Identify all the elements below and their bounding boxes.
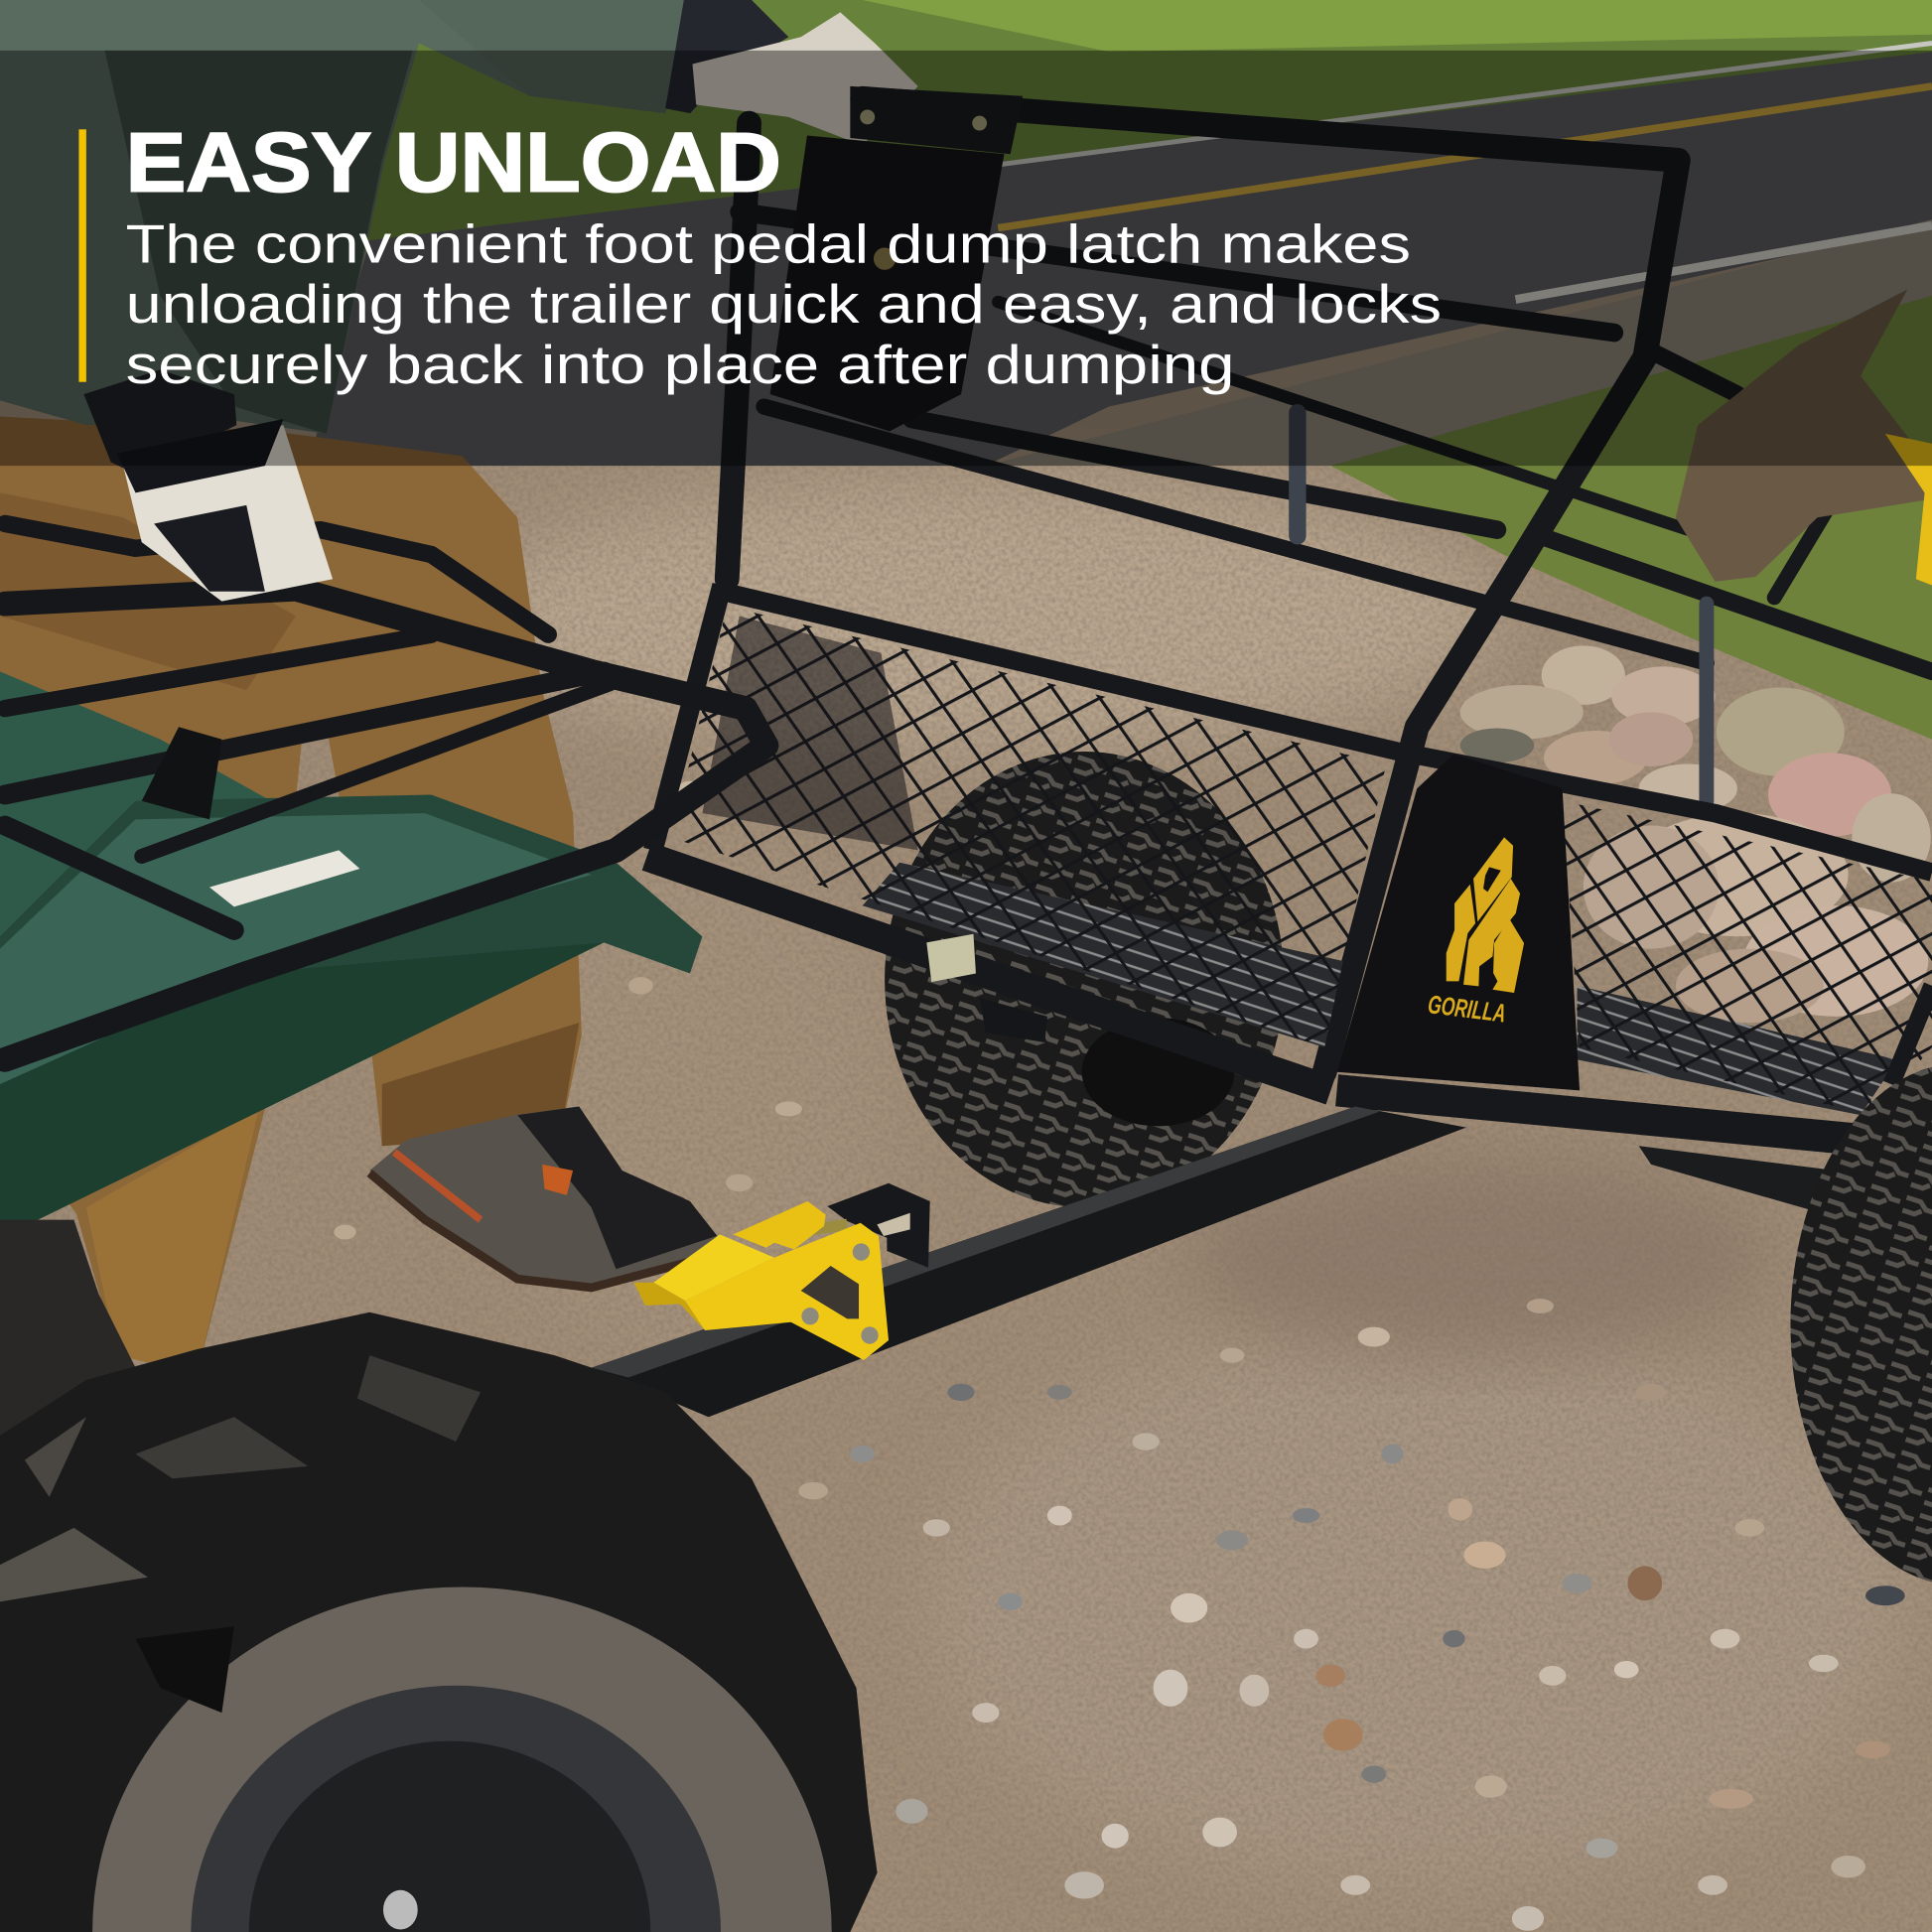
gusset plate with logo bbox=[1337, 755, 1580, 1090]
trailer tongue beam bbox=[592, 1106, 1836, 1417]
ATV: suspension spring bbox=[0, 1220, 136, 1466]
semi-transparent header band bbox=[0, 51, 1932, 466]
small hinge bracket bbox=[926, 934, 1047, 1042]
ATV: large front tire bbox=[0, 1312, 878, 1932]
wire mesh side, right section bbox=[1563, 801, 1932, 1115]
gravel pebbles bbox=[334, 781, 1905, 1931]
rear trailer tire bbox=[885, 752, 1284, 1207]
body text: The convenient foot pedal dump latch makes bbox=[126, 213, 1411, 274]
trailer: rear frame and gate bars bbox=[727, 98, 1932, 1072]
yellow foot pedal latch bbox=[633, 1183, 930, 1360]
yellow accent bar bbox=[78, 129, 86, 382]
front right trailer tire bbox=[1790, 1067, 1932, 1583]
dump gate latch plate bbox=[770, 86, 1023, 431]
background: grass, road and shoulder bbox=[308, 0, 1932, 740]
person: shirt bbox=[0, 0, 692, 434]
trailer floor bbox=[863, 863, 1897, 1115]
body text: unloading the trailer quick and easy, and locks bbox=[126, 274, 1442, 335]
trailer side rails bbox=[647, 586, 1932, 1140]
body text: securely back into place after dumping bbox=[126, 335, 1235, 395]
heading: EASY UNLOAD bbox=[126, 115, 781, 208]
background: gravel ground bbox=[0, 456, 1932, 1932]
logo: gorilla: GORILLA bbox=[1427, 989, 1507, 1029]
shovel head and handle bbox=[1676, 290, 1932, 586]
person: shoe bbox=[369, 1106, 717, 1288]
body text bbox=[126, 213, 1442, 395]
rocks pile bbox=[1460, 645, 1931, 1023]
logo: gorilla bbox=[1427, 837, 1524, 1029]
wire mesh side, left section bbox=[671, 607, 1386, 1047]
person: lower glove bbox=[83, 369, 333, 602]
ATV: body and fender bbox=[0, 671, 702, 1238]
person: upper glove bbox=[665, 0, 918, 145]
person: pants bbox=[0, 416, 582, 1374]
ATV: black cargo rack bbox=[5, 523, 766, 1059]
latch bracket and spring bbox=[801, 1183, 930, 1268]
